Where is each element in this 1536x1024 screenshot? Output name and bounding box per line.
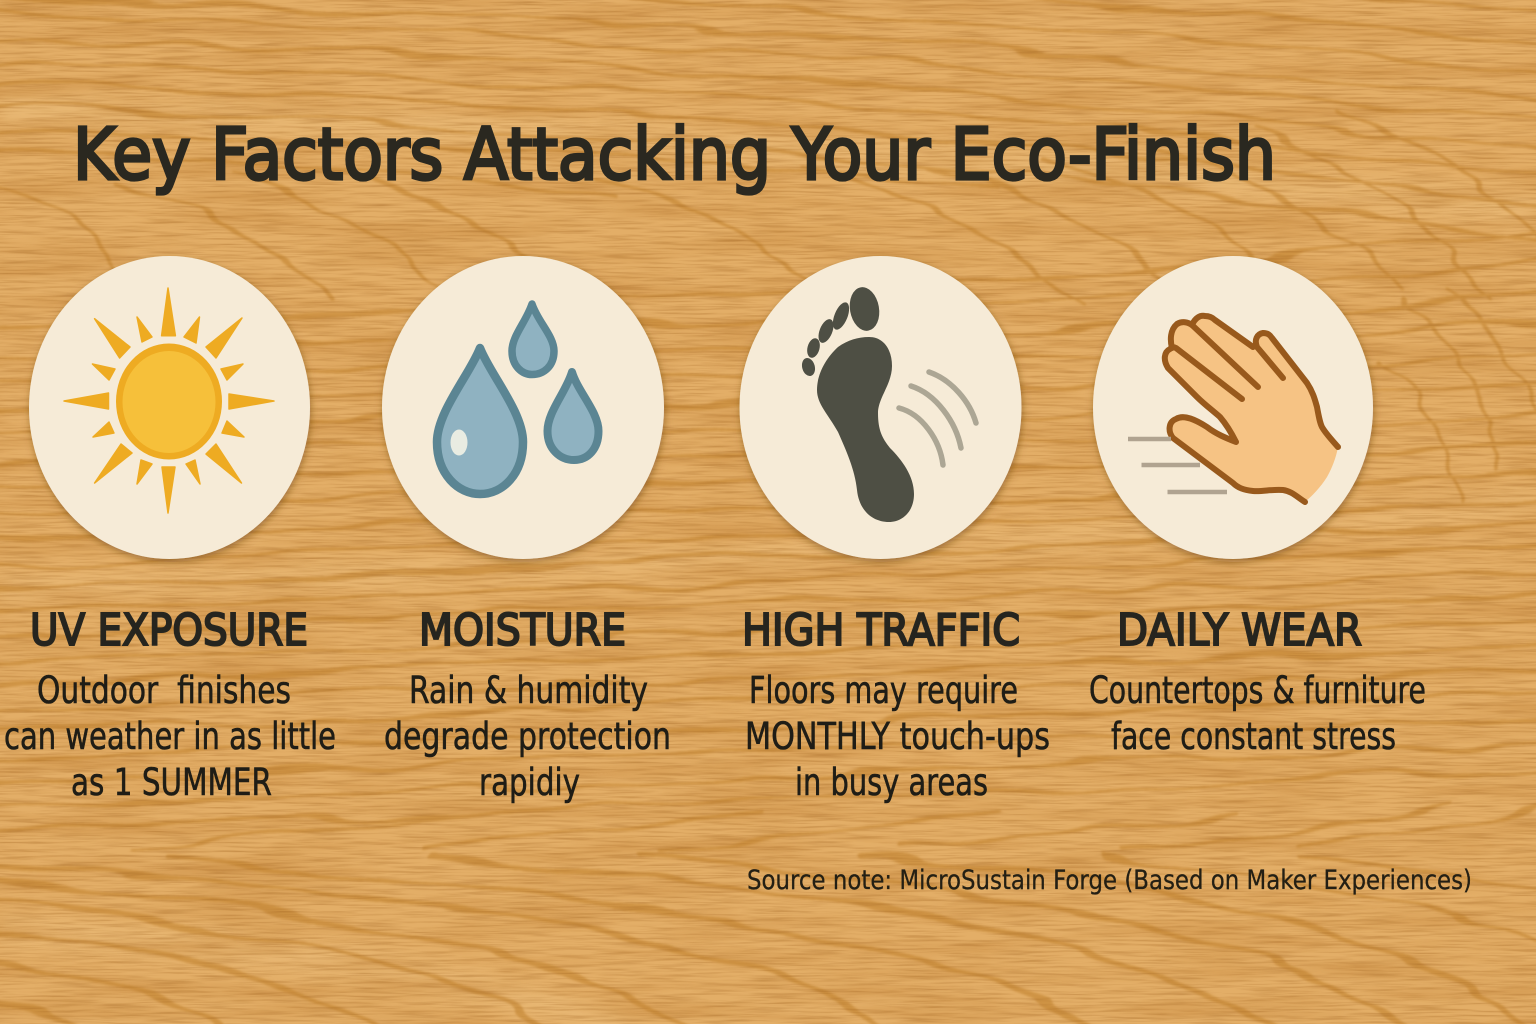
text: UV exposure description bbox=[4, 669, 336, 804]
text: high traffic description: MONTHLY touch-ups bbox=[745, 715, 1050, 758]
heading: moisture: MOISTURE bbox=[419, 605, 626, 656]
badge: daily wear bbox=[1093, 256, 1373, 559]
icon: sun bbox=[64, 288, 274, 513]
icon: water drops bbox=[437, 304, 598, 494]
title: Key Factors Attacking Your Eco-Finish bbox=[73, 113, 1276, 196]
icon: wiping hand bbox=[1128, 316, 1338, 502]
badge: high traffic bbox=[740, 256, 1022, 559]
text: UV exposure description: Outdoor finishes bbox=[37, 669, 291, 712]
heading: daily wear: DAILY WEAR bbox=[1117, 605, 1362, 656]
badge: UV exposure bbox=[29, 256, 310, 559]
text: daily wear description: Countertops & furniture bbox=[1089, 669, 1426, 712]
text: moisture description: Rain & humidity bbox=[409, 669, 648, 712]
text: UV exposure description: can weather in as little bbox=[4, 715, 336, 758]
icon: footprint bbox=[800, 285, 976, 522]
text: high traffic description bbox=[745, 669, 1050, 804]
text: daily wear description: face constant stress bbox=[1111, 715, 1396, 758]
panel: UV exposure bbox=[4, 256, 336, 804]
text: moisture description: rapidiy bbox=[479, 761, 580, 804]
heading: high traffic: HIGH TRAFFIC bbox=[742, 605, 1020, 656]
badge: moisture bbox=[382, 256, 664, 559]
panel: moisture bbox=[382, 256, 671, 804]
text: moisture description: degrade protection bbox=[384, 715, 671, 758]
text: daily wear description bbox=[1089, 669, 1426, 758]
text: UV exposure description: as 1 SUMMER bbox=[71, 761, 272, 804]
text: high traffic description: Floors may require bbox=[749, 669, 1018, 712]
panel: daily wear bbox=[1089, 256, 1426, 758]
text: high traffic description: in busy areas bbox=[795, 761, 988, 804]
panel: high traffic bbox=[740, 256, 1050, 804]
text: moisture description bbox=[384, 669, 671, 804]
heading: UV exposure: UV EXPOSURE bbox=[30, 605, 308, 656]
